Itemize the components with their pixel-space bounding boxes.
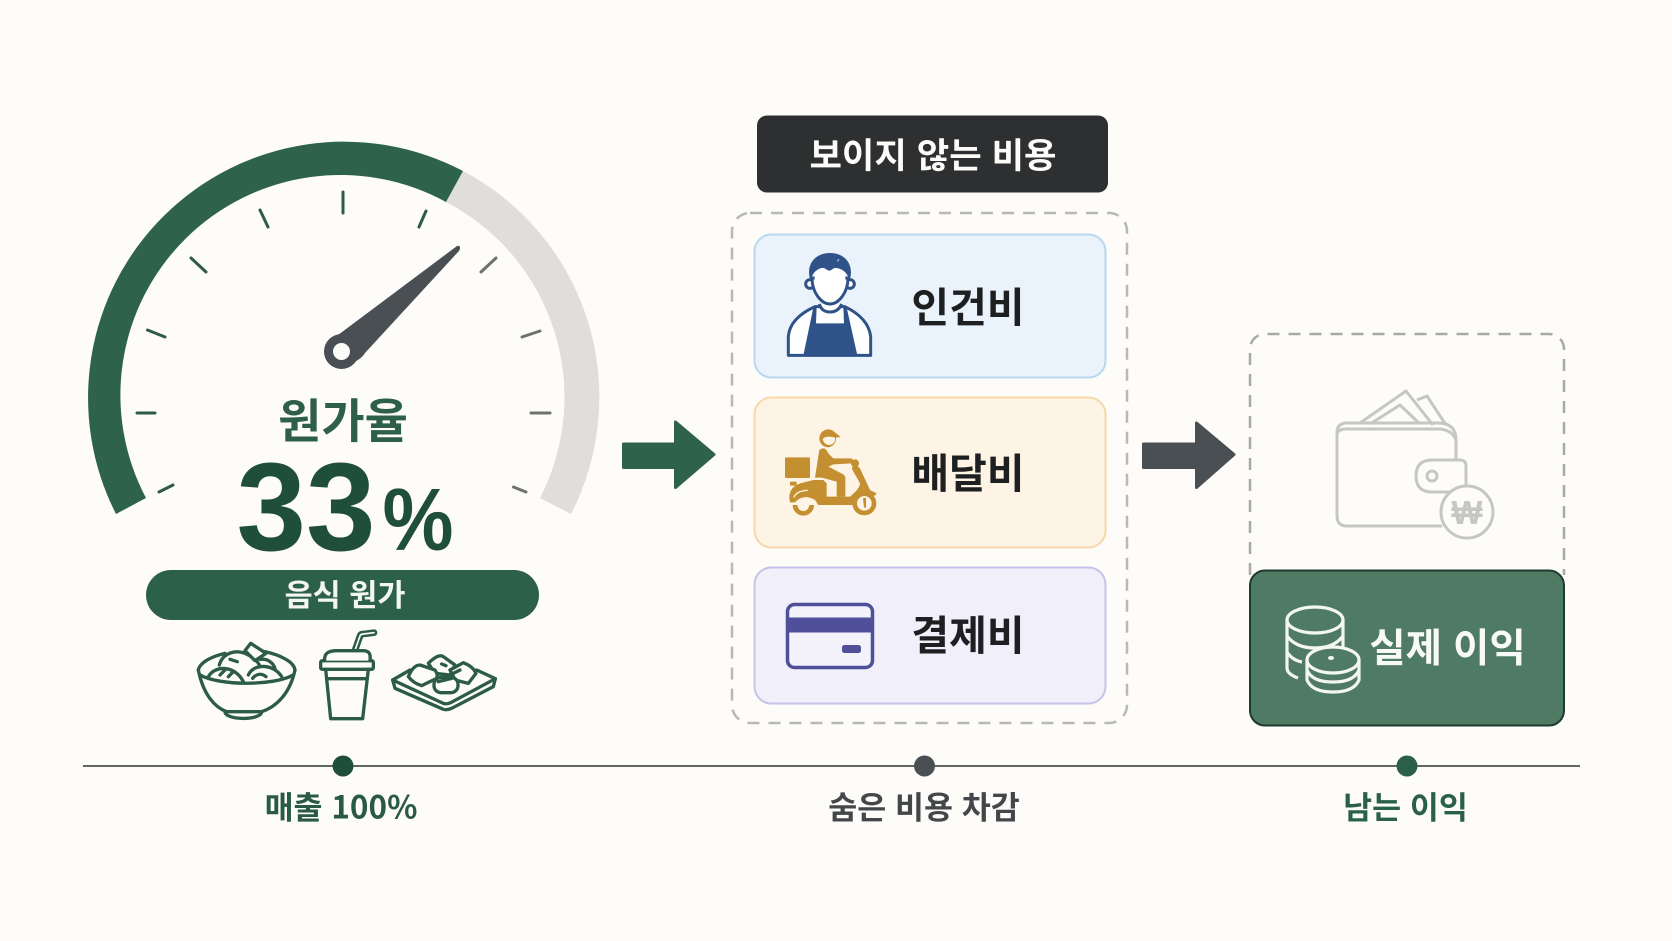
icon: delivery scooter [785,429,877,516]
icon: tray of food [393,656,495,710]
label: delivery cost: 배달비 [911,440,1025,500]
pill: food cost: 음식 원가 [285,571,405,615]
panel: real profit [1250,334,1564,726]
timeline dot: sales [332,756,354,776]
won sign: ₩ [1451,494,1483,531]
timeline label: sales 100%: 매출 100% [265,782,417,828]
gauge needle [324,246,460,369]
dashed group border [732,213,1127,723]
panel: hidden costs [732,116,1127,723]
card: delivery cost [754,398,1106,548]
gauge arc: remaining grey [446,171,599,514]
icon: drink cup [321,633,374,719]
card: payment cost [754,568,1106,704]
icon: coin stacks [1287,607,1359,692]
gauge label: 원가율 [278,383,408,452]
card: labor cost [754,234,1106,378]
header: hidden costs [757,116,1108,192]
timeline dot: hidden costs [914,756,935,776]
food icons [198,633,495,719]
timeline label: hidden costs deducted: 숨은 비용 차감 [828,782,1020,828]
dashed profit border [1250,334,1564,575]
icon: credit card [788,604,872,668]
timeline line [83,765,1580,767]
box: real profit [1250,570,1564,726]
timeline [83,756,1580,828]
label: real profit: 실제 이익 [1369,617,1526,674]
label: labor cost: 인건비 [911,274,1025,334]
arrow: dark grey [1144,423,1234,488]
gauge ticks [137,192,550,492]
timeline dot: profit [1396,756,1418,776]
pill: food cost [146,570,539,620]
panel: cost ratio gauge [88,142,599,719]
big number: 33 [236,438,376,577]
arrow: green [624,422,714,488]
percent sign: % [382,470,454,569]
icon: wallet with won coin [1337,391,1493,538]
gauge arc: green filled [88,142,463,514]
icon: rice bowl [198,643,295,718]
icon: worker in apron [788,253,871,355]
timeline label: remaining profit: 남는 이익 [1343,782,1468,828]
header: hidden costs: 보이지 않는 비용 [809,128,1057,179]
label: payment cost: 결제비 [911,602,1025,662]
